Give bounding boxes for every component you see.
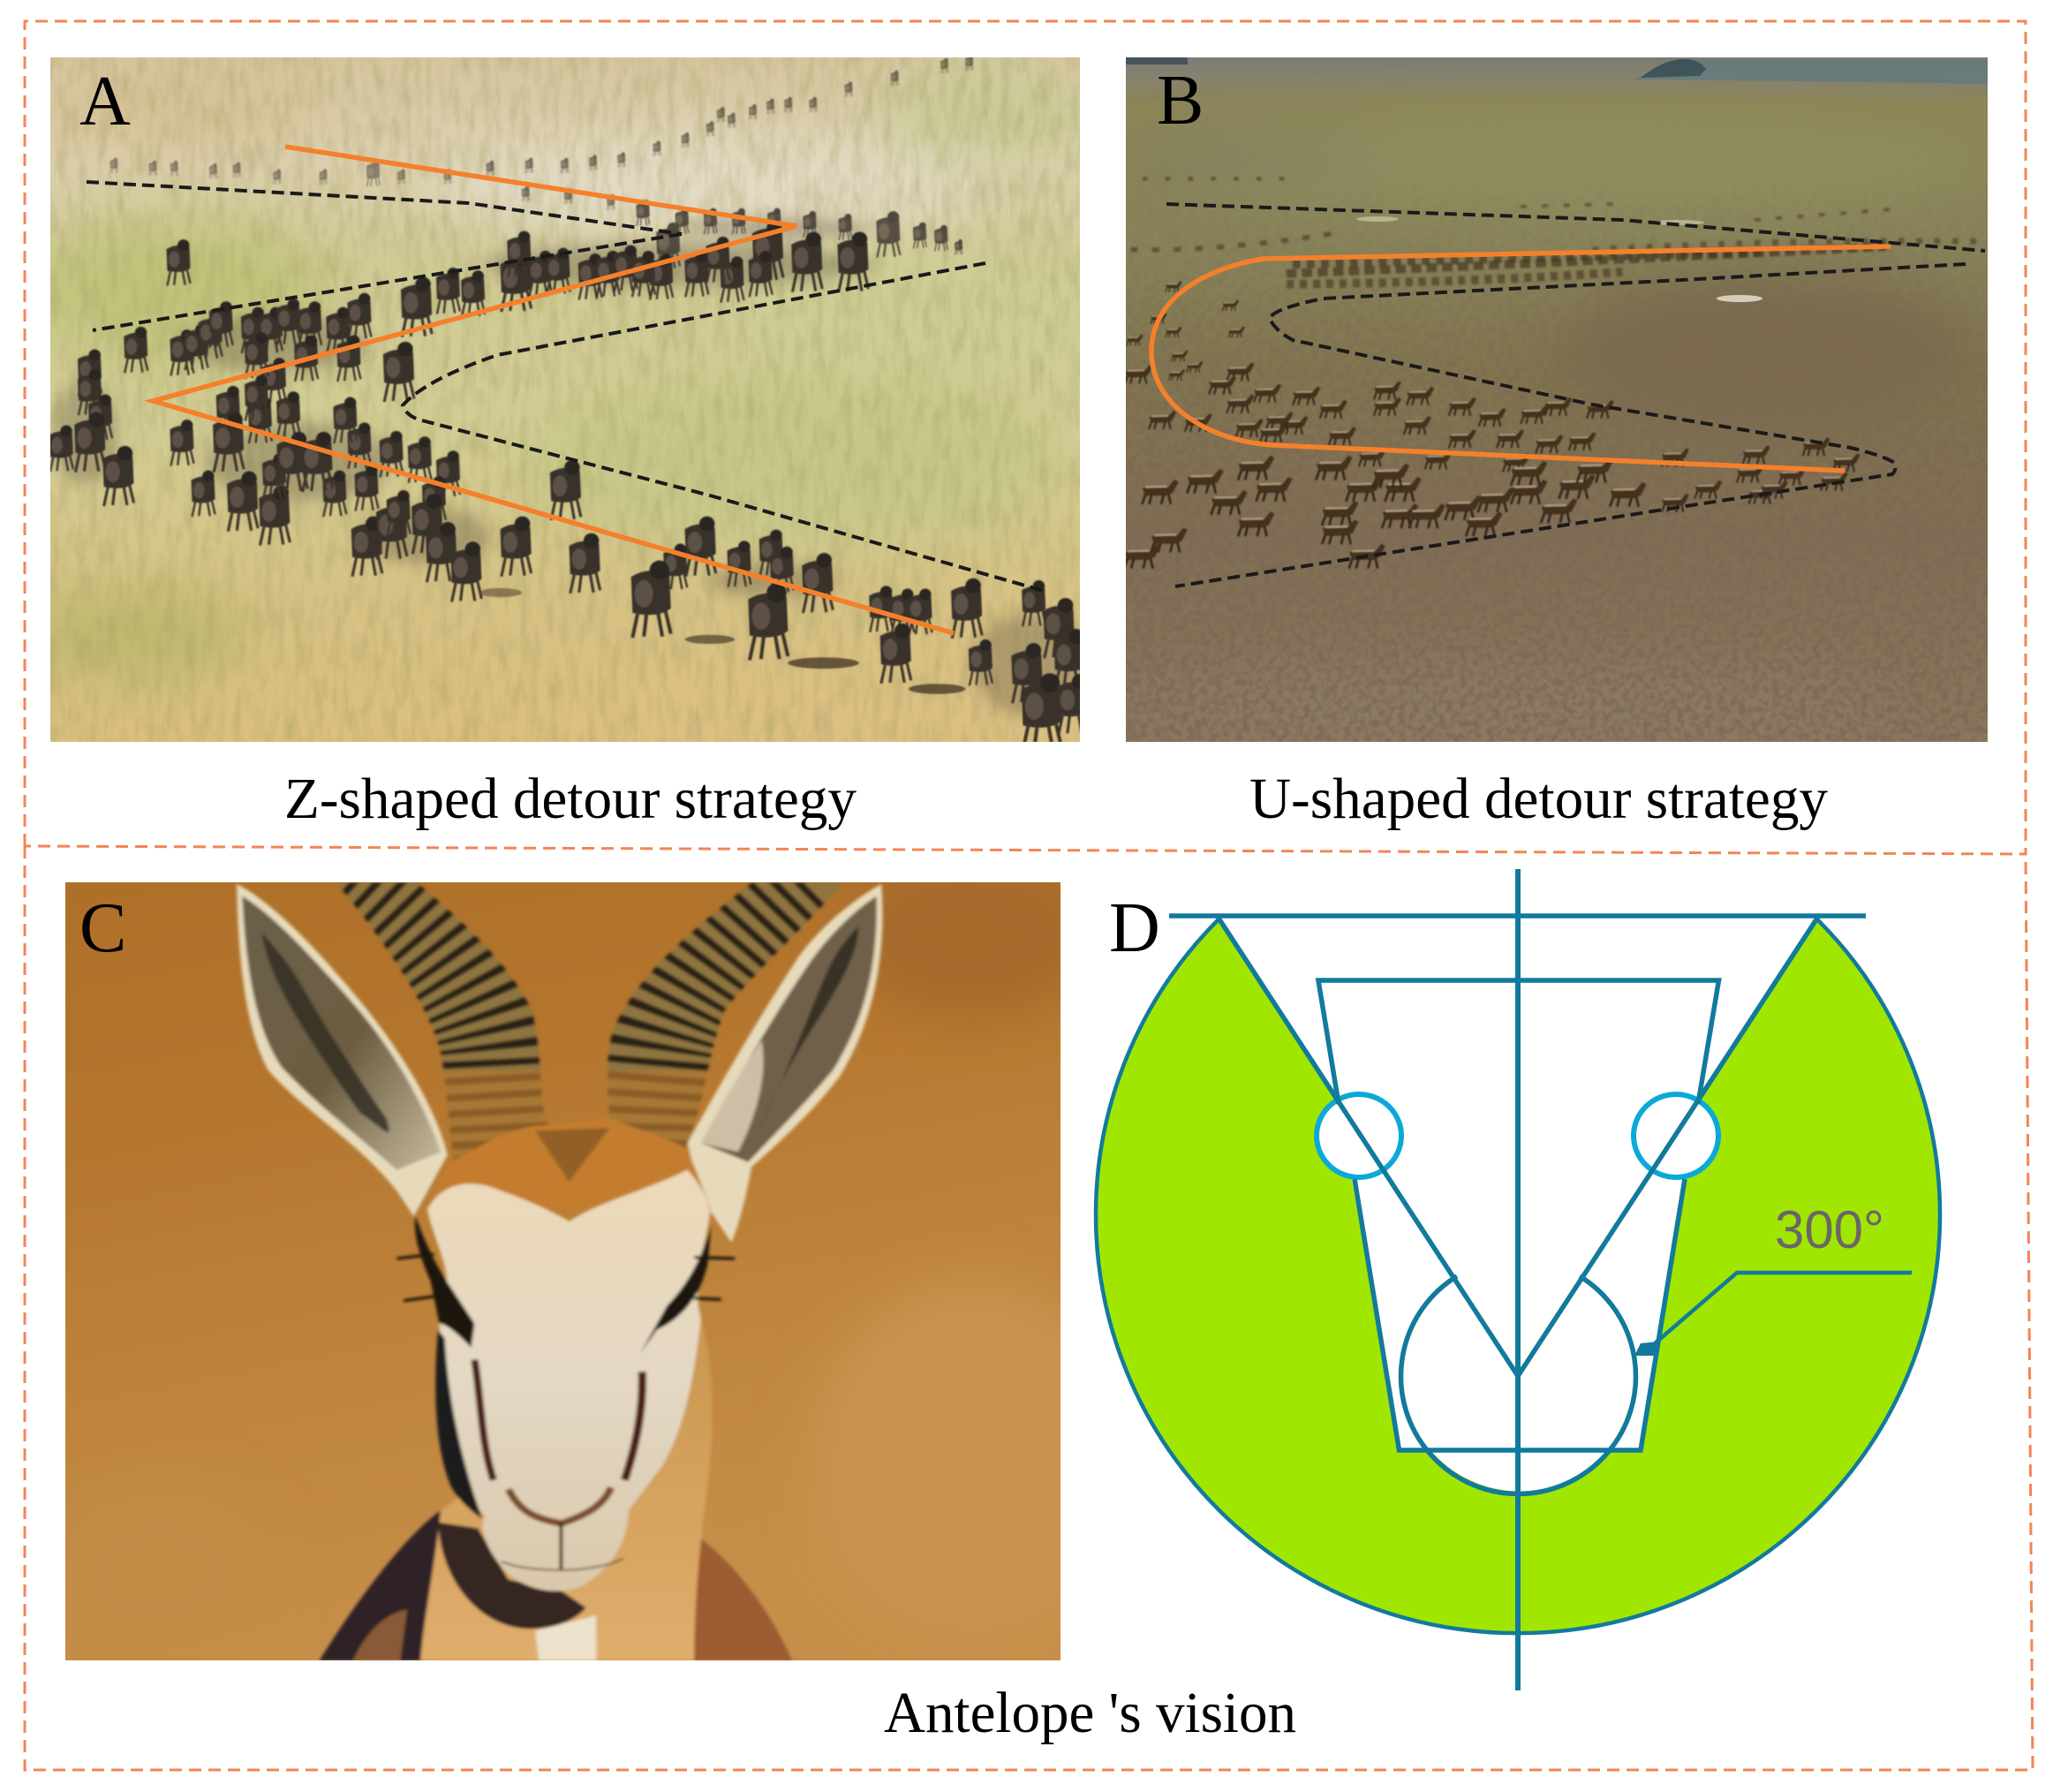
right horn with rings xyxy=(607,878,843,1167)
forehead xyxy=(427,1117,711,1209)
right ear xyxy=(688,884,882,1243)
right eye circle xyxy=(1634,1094,1718,1177)
warm blurred backdrop xyxy=(44,857,1130,1660)
axes and sight lines xyxy=(1169,869,1866,1690)
antelope herd xyxy=(1124,178,1982,569)
panel C: antelope portrait photo xyxy=(44,857,1130,1660)
orange U-shaped route line xyxy=(1151,246,1891,471)
wildebeest herd along a zigzag xyxy=(49,56,1089,751)
chest patch xyxy=(535,1615,596,1660)
face xyxy=(427,1170,710,1591)
dashed herd boundaries xyxy=(1166,204,1985,586)
dashed herd boundaries xyxy=(87,182,1044,591)
panel: upper dashed frame xyxy=(25,21,2026,854)
label B: B xyxy=(1157,62,1204,140)
panel: lower dashed frame xyxy=(25,846,2033,1770)
left ear xyxy=(237,884,448,1216)
muzzle xyxy=(502,1487,623,1570)
antelope head xyxy=(237,878,882,1660)
outer field arc xyxy=(1096,920,1940,1633)
caption: Z-shaped detour strategy: Z-shaped detour strategy xyxy=(284,767,857,831)
left cheek stripes xyxy=(435,1329,494,1519)
antelope head outline xyxy=(1318,980,1718,1493)
300 degree label: 300° xyxy=(1775,1200,1884,1259)
panel D: vision field diagram xyxy=(1096,869,1940,1690)
300 degree callout leader xyxy=(1634,1273,1912,1356)
right eye patch xyxy=(640,1224,711,1354)
caption: U-shaped detour strategy: U-shaped detour strategy xyxy=(1249,767,1828,831)
label A: A xyxy=(79,63,131,140)
grassland background xyxy=(18,57,1121,751)
green visual field xyxy=(1096,920,1940,1633)
orange Z-shaped route line xyxy=(153,147,954,633)
panel A: Z-shaped detour photo xyxy=(18,56,1121,751)
panel B: U-shaped detour photo xyxy=(1104,57,1996,742)
neck xyxy=(420,1318,713,1660)
left eye patch xyxy=(415,1215,474,1348)
label C: C xyxy=(79,889,126,967)
chin shadow xyxy=(438,1523,586,1629)
caption: Antelope's vision: Antelope 's vision xyxy=(884,1681,1296,1745)
body and shoulders xyxy=(319,1510,792,1660)
right cheek stripes xyxy=(624,1372,642,1480)
left horn with rings xyxy=(336,878,555,1167)
eye lashes xyxy=(396,1254,735,1301)
plain background xyxy=(1104,57,1996,742)
left eye circle xyxy=(1317,1094,1401,1177)
label D: D xyxy=(1109,889,1160,967)
